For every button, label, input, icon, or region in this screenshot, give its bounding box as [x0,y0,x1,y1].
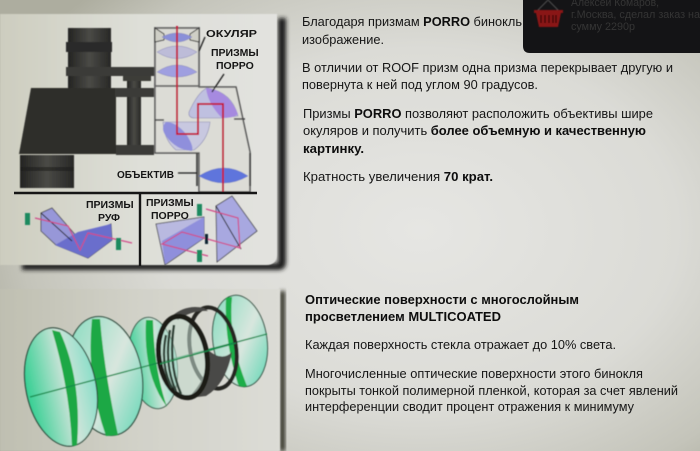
reflection note: Каждая поверхность стекла отражает до 10% света. [305,338,616,352]
paragraph 3: картинку. [303,142,364,156]
main body [19,88,116,154]
eyepiece barrel [68,28,111,88]
objective outline [197,153,250,186]
housing ledges [155,119,245,120]
lens two [58,310,152,442]
panel: multicoated lenses [0,289,285,451]
porro middle marker [205,234,208,244]
upper porro prism [189,88,238,118]
label: porro prisms: ПОРРО [216,60,254,72]
card surface [0,14,277,265]
coating description: интерференции сводит процент отражения к минимуму [305,400,635,414]
lens three [123,314,183,412]
text block: multicoated [305,293,678,414]
threaded ring body [172,307,232,398]
rear lens [207,292,273,390]
heading [305,293,579,324]
light path [177,26,223,193]
bridge bar [66,67,155,76]
text block: porro prisms [302,15,673,184]
binocular cutaway [19,26,250,193]
threaded ring front [153,313,213,401]
roof out marker [116,238,121,250]
porro bottom marker [197,250,202,262]
label: porro prisms small: ПРИЗМЫ [146,197,194,209]
threaded ring rear [183,304,243,392]
icon: basket [534,0,563,27]
hinge lower block [116,145,154,155]
eyepiece outline [155,28,199,86]
paragraph 2 [302,61,673,92]
label: objective: ОБЪЕКТИВ [117,169,174,181]
pointer arrows [178,37,224,173]
order notification popup [523,0,700,53]
roof prism diagram [25,208,132,258]
lens one [14,321,108,451]
label: roof prisms: РУФ [98,212,120,224]
objective lens [199,168,248,183]
label: roof prisms: ПРИЗМЫ [86,199,134,211]
paragraph 1 [302,15,522,47]
paragraph 3: окуляров и получить более объемную и качественную [303,124,646,138]
section dividers [14,193,257,266]
paragraph 2: В отличии от ROOF призм одна призма перекрывает другую и [302,61,673,75]
popup background [523,0,700,53]
roof in marker [25,213,30,225]
porro top marker [197,204,202,216]
card shadow [22,18,286,270]
lens assembly [14,292,273,451]
objective barrel [20,155,74,188]
label: porro prisms: ПРИЗМЫ [211,47,259,59]
card shadow [280,291,285,451]
hinge column [127,81,141,146]
hinge knob [123,76,151,81]
lower porro prism [163,122,210,150]
coating description [305,367,678,414]
paragraph 1: изображение. [302,33,384,47]
coating description: покрыты тонкой полимерной пленкой, которая за счет явлений [305,384,678,398]
paragraph 3 [303,107,653,156]
optical axis [30,334,267,397]
prism housing outline [155,84,250,192]
porro prism diagram [156,196,257,265]
panel: binocular prism diagram [0,14,286,270]
eyepiece lens stack [157,33,197,77]
card surface [0,289,280,451]
paragraph 3: Призмы PORRO позволяют расположить объективы шире [303,107,653,121]
popup message: г.Москва, сделал заказ на [571,9,700,21]
eyepiece band [66,42,112,52]
hinge upper block [115,88,154,97]
eyepiece cups [155,28,199,42]
heading: просветлением MULTICOATED [305,310,501,324]
label: porro prisms small: ПОРРО [151,210,189,222]
coating description: Многочисленные оптические поверхности этого бинокля [305,367,643,381]
paragraph 2: повернута к ней под углом 90 градусов. [302,78,538,92]
label: eyepiece: ОКУЛЯР [206,28,257,40]
paragraph 1: Благодаря призмам PORRO бинокль [302,15,522,29]
heading: Оптические поверхности с многослойным [305,293,579,307]
popup message: сумму 2290р [571,21,635,33]
paragraph 4: Кратность увеличения 70 крат. [303,170,493,184]
